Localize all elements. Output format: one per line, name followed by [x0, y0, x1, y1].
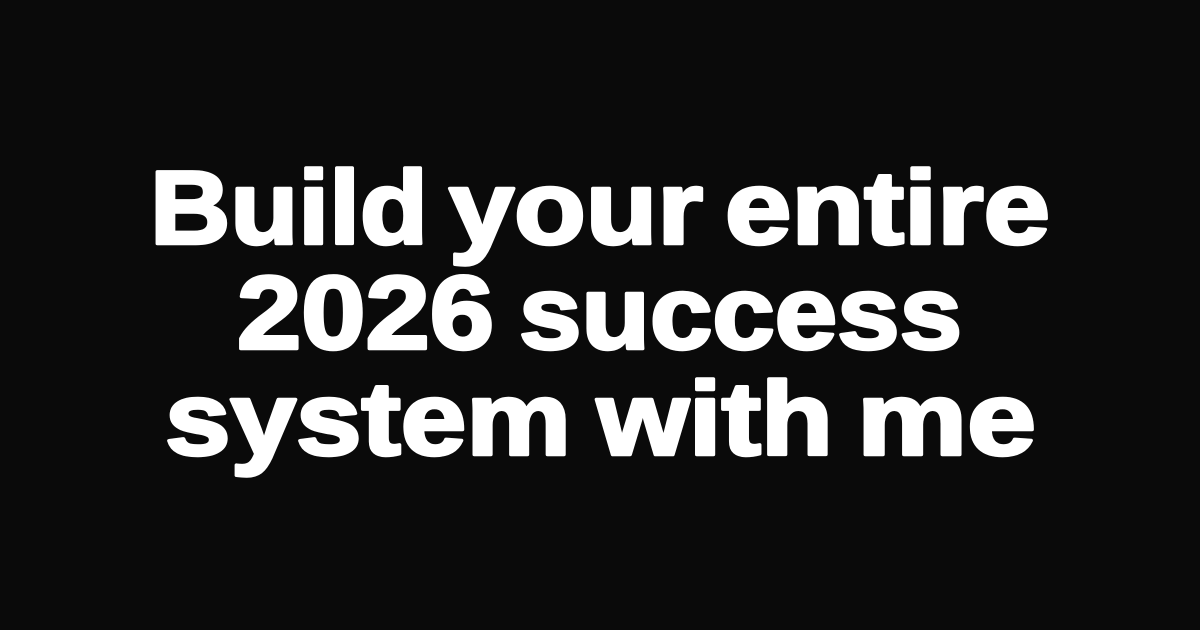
title line 1: your [449, 150, 703, 266]
title line 2 [237, 256, 962, 372]
title line 3: me [857, 362, 1036, 478]
title line 2: 2026 [237, 256, 494, 372]
title line 1 [150, 150, 1050, 266]
title line 1: entire [725, 150, 1050, 266]
title line 1: Build [150, 150, 428, 266]
title line 3: system [165, 362, 571, 478]
title line 3: with [596, 362, 833, 478]
title line 2: success [519, 256, 962, 372]
title line 3 [165, 362, 1036, 478]
